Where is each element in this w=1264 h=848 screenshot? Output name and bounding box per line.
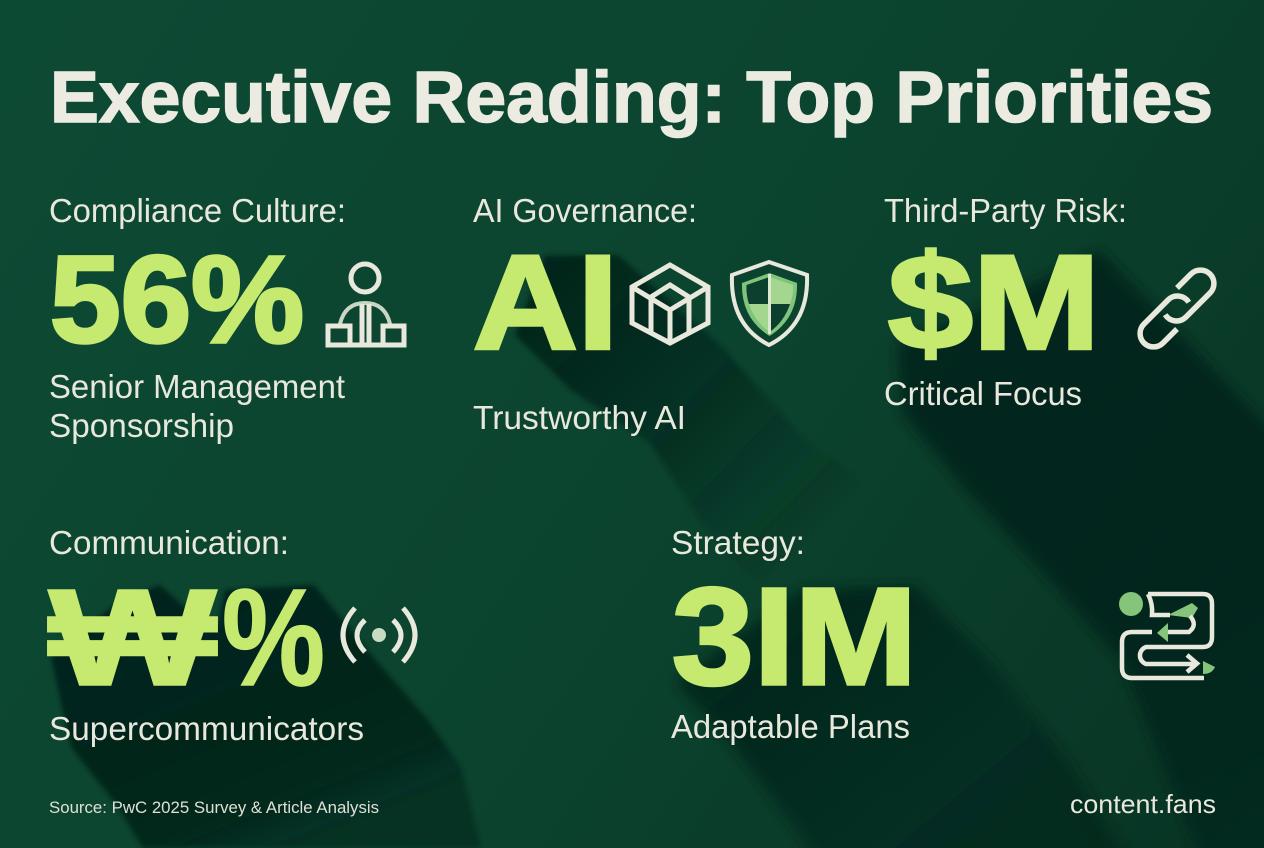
caption: trustworthy AI: Trustworthy AI [473,399,686,436]
big number: 56%: 56% [50,232,304,369]
icon: shield [732,262,807,345]
long diagonal shadows [51,250,1264,848]
heading: AI governance: AI Governance: [473,192,697,229]
caption: supercommunicators: Supercommunicators [49,710,364,747]
icon: broadcast signal [343,608,415,662]
panel: communication [48,524,415,747]
heading: compliance culture: Compliance Culture: [49,192,346,229]
big text: $M: $M [888,228,1100,378]
panel: compliance culture [49,192,404,444]
big text: won percent: % [222,561,325,715]
brand: content.fans [1070,789,1216,819]
caption: critical focus: Critical Focus [884,375,1082,412]
big text: won percent: ₩ [48,561,218,715]
title: Executive Reading: Top Priorities [50,58,1213,138]
icon: chain link [1140,270,1214,347]
icon: person with boxes [328,264,404,345]
heading: third-party risk: Third-Party Risk: [884,192,1127,229]
panel: third-party risk [884,192,1214,412]
big text: AI: AI [473,228,618,378]
panel: strategy [671,524,1215,745]
icon: cube [632,265,708,343]
heading: communication: Communication: [49,524,289,561]
big text: 3IM: 3IM [672,560,917,714]
caption: senior management sponsorship [49,368,345,444]
heading: strategy: Strategy: [671,524,805,561]
caption: adaptable plans: Adaptable Plans [671,708,910,745]
icon: winding path [1119,592,1215,678]
source note: Source: PwC 2025 Survey & Article Analysis [49,798,379,817]
panel: AI governance [473,192,807,436]
caption: senior management sponsorship: Senior Management [49,368,345,405]
big text: won percent [48,561,325,715]
caption: senior management sponsorship: Sponsorship [49,407,234,444]
